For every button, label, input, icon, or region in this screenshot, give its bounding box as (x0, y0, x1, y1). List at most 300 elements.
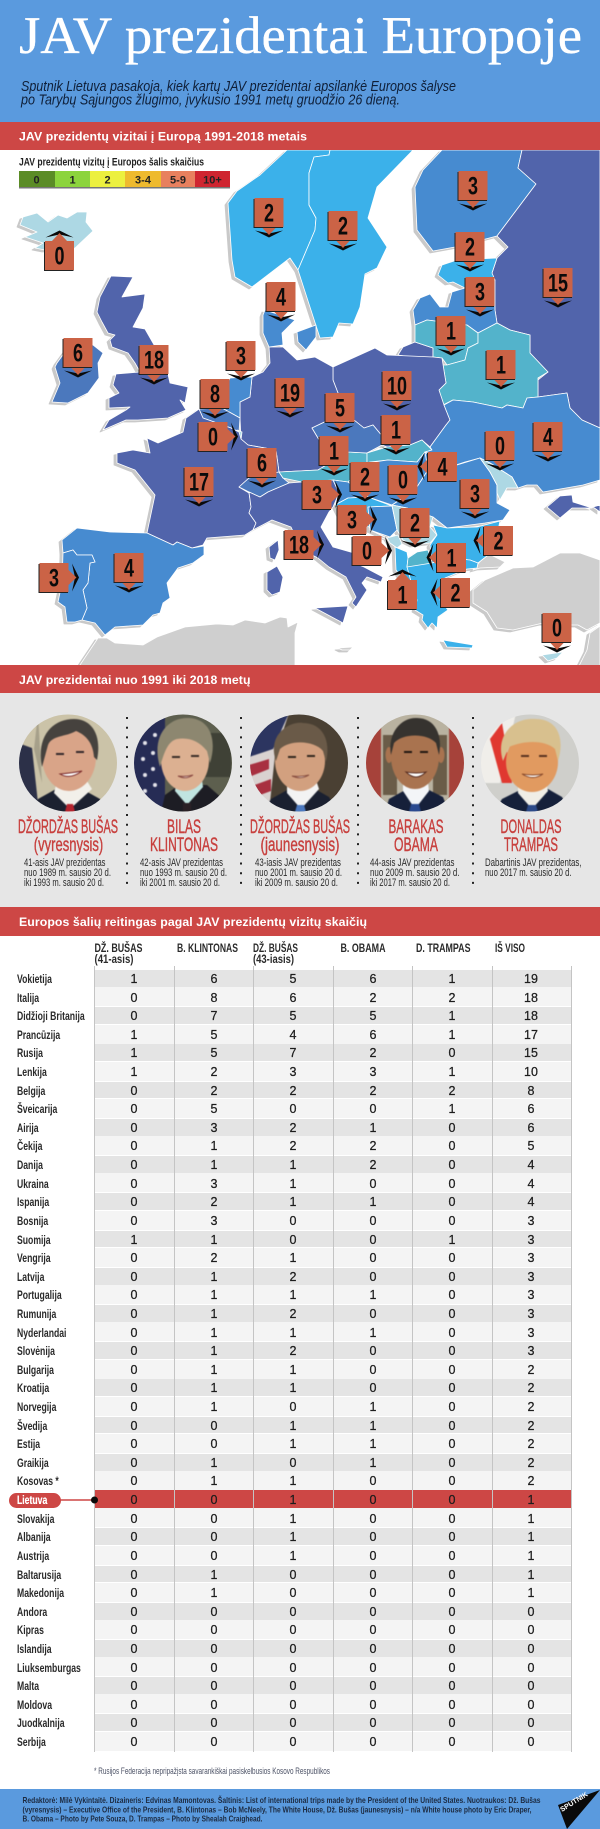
marker: Bulgaria: 2 (493, 527, 504, 555)
row: 1 (211, 1363, 217, 1377)
Netherlands (222, 377, 252, 418)
president 5: name and term: TRAMPAS (504, 835, 558, 856)
marker: Estonia: 2 (465, 233, 475, 261)
United Kingdom (97, 276, 188, 430)
row: Andora (17, 1605, 47, 1619)
row: 3 (290, 1065, 296, 1079)
row: 0 (528, 1735, 534, 1749)
Poland (333, 348, 450, 447)
row (0, 1733, 600, 1752)
table header: B. OBAMA (340, 941, 386, 955)
row: 0 (528, 1605, 534, 1619)
table grid and Lietuva pointer (60, 966, 572, 1752)
marker: France (184, 467, 214, 506)
row: 0 (131, 1344, 137, 1358)
row: 0 (131, 1084, 137, 1098)
Croatia (335, 497, 392, 538)
row: 0 (131, 1214, 137, 1228)
row: 7 (211, 1009, 217, 1023)
marker: Latvia: 3 (475, 278, 485, 306)
row: 0 (290, 1102, 296, 1116)
marker: Germany: 19 (280, 379, 300, 407)
row: 3 (528, 1233, 534, 1247)
marker: Montenegro: 0 (362, 537, 372, 565)
row: 1 (290, 1549, 296, 1563)
president 3: name and term: (jaunesnysis) (260, 835, 340, 856)
row: 0 (370, 1661, 376, 1675)
row: 0 (370, 1698, 376, 1712)
row (0, 1063, 600, 1082)
row: Švedija (17, 1419, 47, 1433)
row: 1 (370, 1288, 376, 1302)
row: 0 (131, 1009, 137, 1023)
marker: Russia (542, 268, 572, 308)
president 1: name and term (18, 816, 118, 889)
marker: Belgium (200, 379, 230, 418)
row: 6 (528, 1102, 534, 1116)
president 3: name and term (250, 816, 350, 889)
marker: Denmark: 4 (276, 283, 286, 311)
row: 2 (528, 1400, 534, 1414)
row: 0 (449, 1698, 455, 1712)
row: 1 (370, 1195, 376, 1209)
marker: Finland: 3 (468, 172, 478, 200)
row: 0 (449, 1623, 455, 1637)
row: 1 (211, 1233, 217, 1247)
portrait: George W. Bush (249, 713, 349, 813)
row: 0 (290, 1698, 296, 1712)
president 3: name and term: iki 2009 m. sausio 20 d. (255, 877, 338, 889)
row: 0 (131, 1586, 137, 1600)
section heading: ranking: Europos šalių reitingas pagal JAV prezidentų vizitų skaičių (19, 915, 367, 929)
row: 1 (290, 1288, 296, 1302)
row: 0 (449, 1326, 455, 1340)
row: 1 (370, 1400, 376, 1414)
Ukraine (425, 393, 600, 492)
row: 0 (131, 1419, 137, 1433)
row: 0 (449, 1307, 455, 1321)
president 4: name and term: iki 2017 m. sausio 20 d. (370, 877, 450, 889)
row: Lietuva highlighted: 1 (290, 1493, 296, 1507)
Macedonia (407, 550, 432, 568)
row: 1 (211, 1158, 217, 1172)
row: Vokietija (17, 972, 52, 986)
row: 1 (290, 1530, 296, 1544)
row: 0 (449, 1177, 455, 1191)
row: 1 (290, 1512, 296, 1526)
row: 2 (528, 1363, 534, 1377)
row: 5 (528, 1139, 534, 1153)
row: 0 (131, 1270, 137, 1284)
section heading: presidents: JAV prezidentai nuo 1991 iki 2018 metų (19, 673, 250, 687)
row: 0 (449, 1139, 455, 1153)
Serbia (392, 505, 437, 545)
marker: Macedonia (426, 543, 466, 573)
row: 0 (370, 1623, 376, 1637)
row: 1 (131, 1065, 137, 1079)
row: 0 (449, 1549, 455, 1563)
row: 0 (370, 1307, 376, 1321)
row: 1 (449, 972, 455, 986)
row: 0 (290, 1400, 296, 1414)
row: Danija (17, 1158, 43, 1172)
row: Didžioji Britanija (17, 1009, 85, 1023)
row: 10 (524, 1065, 538, 1079)
Switzerland (239, 472, 289, 497)
row: 0 (370, 1530, 376, 1544)
row: 6 (370, 972, 376, 986)
president 3: name and term: 43-iasis JAV prezidentas (255, 857, 341, 869)
row: 0 (131, 1512, 137, 1526)
row: Lietuva highlighted: Lietuva (17, 1493, 47, 1507)
row: 2 (290, 1307, 296, 1321)
marker: Greece: 2 (450, 579, 461, 607)
row: 0 (370, 1363, 376, 1377)
row (0, 1342, 600, 1361)
section heading: presidents (0, 665, 600, 693)
row: Serbija (17, 1735, 46, 1749)
marker: Luxembourg: 0 (208, 423, 218, 451)
legend: 5-9 (170, 174, 186, 186)
row: 0 (131, 1623, 137, 1637)
row: 18 (524, 991, 538, 1005)
row: 15 (524, 1046, 538, 1060)
marker: Hungary (418, 452, 457, 482)
marker: Bosnia (336, 505, 377, 535)
row: 0 (449, 1735, 455, 1749)
row: 17 (524, 1028, 538, 1042)
marker: Sweden: 2 (338, 212, 348, 240)
row: 7 (290, 1046, 296, 1060)
row: 1 (211, 1474, 217, 1488)
row (0, 1249, 600, 1268)
row: 2 (528, 1419, 534, 1433)
president 2: name and term: KLINTONAS (150, 835, 218, 856)
row: 0 (211, 1716, 217, 1730)
row: Slovėnija (17, 1344, 55, 1358)
row: 2 (370, 1158, 376, 1172)
legend: 1 (69, 174, 76, 186)
row: 0 (131, 1326, 137, 1340)
marker: Ireland: 6 (73, 339, 83, 367)
row (0, 1286, 600, 1305)
row: 1 (131, 1233, 137, 1247)
row: 0 (528, 1661, 534, 1675)
marker: Italy (284, 530, 324, 560)
row: 1 (370, 1437, 376, 1451)
row: 0 (290, 1214, 296, 1228)
row: 1 (211, 1326, 217, 1340)
row: 5 (211, 1102, 217, 1116)
marker: France: 17 (189, 468, 209, 496)
section heading: ranking (0, 907, 600, 936)
row: 0 (449, 1586, 455, 1600)
row: 0 (449, 1512, 455, 1526)
row: 1 (211, 1400, 217, 1414)
row: 1 (449, 1009, 455, 1023)
pill: Lietuva (9, 1492, 61, 1508)
row: 1 (290, 1177, 296, 1191)
row: 3 (370, 1065, 376, 1079)
Montenegro (387, 535, 402, 548)
Moldova (480, 458, 518, 500)
row: 3 (528, 1251, 534, 1265)
president 1: name and term: nuo 1989 m. sausio 20 d. (24, 867, 111, 879)
row (0, 1193, 600, 1212)
marker: Romania (460, 479, 490, 518)
Norway (228, 150, 330, 287)
row (0, 1137, 600, 1156)
row: Islandija (17, 1642, 52, 1656)
portrait: Donald Trump (480, 713, 580, 813)
legend (19, 156, 230, 188)
row: 0 (211, 1605, 217, 1619)
row: 0 (211, 1735, 217, 1749)
row: 5 (370, 1009, 376, 1023)
marker: Poland (382, 371, 412, 410)
row: 0 (131, 1679, 137, 1693)
president 2: name and term: BILAS (167, 817, 201, 838)
marker: Russia: 15 (548, 269, 568, 297)
row: 0 (131, 1698, 137, 1712)
Ireland (52, 345, 103, 403)
subtitle: po Tarybų Sąjungos žlugimo, įvykusio 1991 metų gruodžio 26 dieną. (20, 92, 400, 108)
row: 0 (131, 1195, 137, 1209)
row (0, 1417, 600, 1435)
row (0, 1696, 600, 1714)
row: 1 (131, 1046, 137, 1060)
marker: Germany (274, 378, 304, 418)
row: 4 (528, 1195, 534, 1209)
row: 0 (131, 1381, 137, 1395)
row: 1 (370, 1456, 376, 1470)
row (0, 1677, 600, 1696)
footer (0, 1789, 600, 1829)
row: 0 (449, 1251, 455, 1265)
Estonia (438, 258, 497, 288)
row (0, 1119, 600, 1137)
president 4: name and term: OBAMA (394, 835, 438, 856)
row: 18 (524, 1009, 538, 1023)
row: 1 (211, 1456, 217, 1470)
marker: Lithuania: 1 (446, 317, 456, 345)
row: Rusija (17, 1046, 43, 1060)
marker: Portugal (38, 563, 79, 593)
marker: Switzerland: 6 (257, 449, 267, 477)
row: 0 (290, 1233, 296, 1247)
row: Lietuva highlighted (0, 1491, 600, 1510)
marker: United Kingdom (138, 345, 168, 384)
subtitle (20, 79, 456, 108)
row: 0 (131, 1735, 137, 1749)
row: Prancūzija (17, 1028, 60, 1042)
row: 0 (449, 1474, 455, 1488)
row: 1 (131, 972, 137, 986)
row (0, 1044, 600, 1063)
legend: 2 (104, 174, 111, 186)
row: 0 (449, 1158, 455, 1172)
row: 0 (131, 991, 137, 1005)
row: Lietuva highlighted: 1 (528, 1493, 534, 1507)
row: 5 (290, 972, 296, 986)
portrait: Barack Obama (365, 713, 465, 813)
row: 1 (290, 1437, 296, 1451)
row: 2 (370, 1046, 376, 1060)
marker: Greece (430, 578, 470, 608)
row: Airija (17, 1121, 39, 1135)
row: 1 (290, 1195, 296, 1209)
row: 3 (528, 1270, 534, 1284)
row: 0 (290, 1586, 296, 1600)
marker: United Kingdom: 18 (144, 346, 164, 374)
row: 0 (370, 1344, 376, 1358)
row: 2 (290, 1084, 296, 1098)
row (0, 1305, 600, 1324)
row: 1 (370, 1326, 376, 1340)
row: Lenkija (17, 1065, 47, 1079)
row: 0 (449, 1270, 455, 1284)
row: 0 (449, 1214, 455, 1228)
row: 6 (370, 1028, 376, 1042)
row: Norvegija (17, 1400, 56, 1414)
Portugal (58, 550, 95, 622)
row: 0 (370, 1251, 376, 1265)
row: 0 (449, 1381, 455, 1395)
marker: Ukraine: 4 (543, 423, 553, 451)
row: 0 (211, 1512, 217, 1526)
marker: Cyprus: 0 (552, 614, 562, 642)
row: 0 (528, 1679, 534, 1693)
row: Lietuva highlighted: 0 (131, 1493, 137, 1507)
Bosnia (368, 506, 397, 537)
row: 0 (290, 1568, 296, 1582)
row: 0 (211, 1437, 217, 1451)
row: 3 (528, 1326, 534, 1340)
row: 0 (449, 1195, 455, 1209)
marker: Latvia (464, 277, 494, 316)
row: 2 (370, 1139, 376, 1153)
row: 1 (449, 1065, 455, 1079)
marker: Montenegro (352, 536, 392, 566)
row: 0 (449, 1530, 455, 1544)
row (0, 970, 600, 989)
marker: Netherlands (226, 341, 256, 380)
row: 1 (290, 1251, 296, 1265)
row: 0 (370, 1679, 376, 1693)
marker: Norway (254, 198, 284, 238)
marker: Ireland (62, 338, 92, 378)
row: Juodkalnija (17, 1716, 65, 1730)
president 2: name and term: 42-asis JAV prezidentas (140, 857, 223, 869)
row: 2 (211, 1084, 217, 1098)
row: 1 (370, 1121, 376, 1135)
row: 2 (449, 991, 455, 1005)
row: 0 (528, 1716, 534, 1730)
row: 1 (449, 1102, 455, 1116)
marker: Kosovo (400, 508, 430, 548)
marker: Spain (114, 553, 144, 592)
row: 0 (290, 1716, 296, 1730)
row: 1 (211, 1344, 217, 1358)
Belgium (200, 409, 240, 430)
row: 0 (131, 1177, 137, 1191)
Denmark (263, 310, 295, 347)
marker: Portugal: 3 (49, 564, 59, 592)
marker: Hungary: 4 (437, 453, 448, 481)
row: 0 (449, 1679, 455, 1693)
marker: Slovakia: 1 (391, 416, 401, 444)
gray neighbours (80, 553, 600, 668)
row (0, 1566, 600, 1584)
Austria (279, 452, 367, 482)
president 4: name and term: BARAKAS (388, 817, 444, 838)
row: Ispanija (17, 1195, 49, 1209)
map of Europe (20, 150, 600, 668)
row: 0 (370, 1549, 376, 1563)
row: 0 (449, 1288, 455, 1302)
row: 0 (131, 1139, 137, 1153)
row: 0 (131, 1288, 137, 1302)
Sicily (315, 606, 348, 623)
table header: B. KLINTONAS (177, 941, 238, 955)
row: Austrija (17, 1549, 49, 1563)
Corsica (269, 540, 279, 560)
table header (94, 940, 525, 966)
row: 1 (211, 1139, 217, 1153)
row: 0 (449, 1661, 455, 1675)
pill: Lietuva: Lietuva (17, 1492, 47, 1506)
marker: Slovenia: 3 (312, 481, 322, 509)
row: 1 (449, 1233, 455, 1247)
row: Suomija (17, 1233, 51, 1247)
row: 0 (290, 1642, 296, 1656)
row: Liuksemburgas (17, 1661, 81, 1675)
row (0, 1621, 600, 1640)
row: 0 (370, 1568, 376, 1582)
row: Albanija (17, 1530, 51, 1544)
row (0, 1528, 600, 1547)
row: Lietuva highlighted: 0 (211, 1493, 217, 1507)
marker: Netherlands: 3 (236, 342, 246, 370)
Italy (249, 480, 383, 607)
row: 2 (290, 1270, 296, 1284)
marker: Macedonia: 1 (446, 544, 457, 572)
row: 1 (211, 1381, 217, 1395)
row (0, 1398, 600, 1417)
president 4: name and term (370, 817, 460, 889)
Crete (443, 640, 473, 648)
row: 0 (131, 1437, 137, 1451)
marker: Serbia north: 0 (398, 466, 408, 494)
row: 1 (370, 1419, 376, 1433)
row: Lietuva highlighted: 0 (370, 1493, 376, 1507)
row: 0 (370, 1381, 376, 1395)
row (0, 1603, 600, 1621)
Bulgaria (430, 521, 500, 563)
row: 3 (528, 1288, 534, 1302)
row (0, 1714, 600, 1733)
row: 0 (131, 1158, 137, 1172)
row: 0 (449, 1344, 455, 1358)
row: 1 (528, 1530, 534, 1544)
row: 0 (370, 1270, 376, 1284)
row: 0 (131, 1549, 137, 1563)
row: 0 (449, 1363, 455, 1377)
panel: presidents (0, 693, 600, 907)
marker: Albania (387, 570, 417, 610)
row: 19 (524, 972, 538, 986)
row (0, 1268, 600, 1286)
